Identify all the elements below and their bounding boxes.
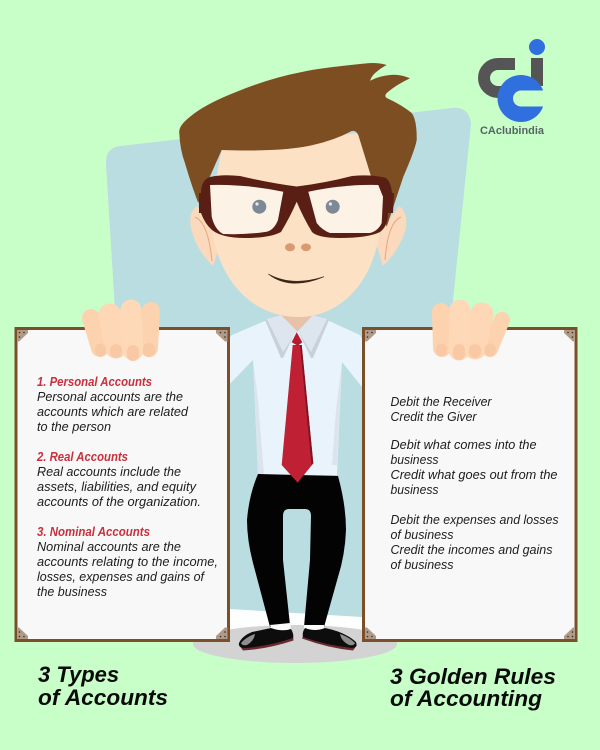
logo blue dot <box>529 39 545 55</box>
face <box>211 133 381 317</box>
character <box>179 63 417 650</box>
text: types of accounts: assets, liabilities, and equity <box>37 479 197 494</box>
text: golden rules: Debit the Receiver <box>390 394 492 409</box>
text: types of accounts: losses, expenses and gains of <box>37 569 205 584</box>
background panel <box>106 108 471 640</box>
text: types of accounts: to the person <box>37 419 111 434</box>
collar <box>265 314 329 358</box>
text: golden rules: Credit the Giver <box>390 409 477 424</box>
heading: 3 Golden Rules of Accounting: 3 Golden Rules <box>390 664 556 689</box>
board corners <box>365 330 575 639</box>
logo: CAclubindia <box>480 39 546 137</box>
text: types of accounts: the business <box>37 584 107 599</box>
text: golden rules: business <box>390 482 439 497</box>
board corners <box>17 330 228 639</box>
shirt <box>222 320 366 475</box>
hair <box>179 63 417 227</box>
text: types of accounts: 2. Real Accounts <box>36 449 128 464</box>
tie <box>282 332 313 483</box>
neck <box>280 315 312 332</box>
corner rivets <box>19 332 226 637</box>
right shoe <box>302 628 357 650</box>
text: types of accounts: Personal accounts are the <box>37 389 183 404</box>
socks <box>270 623 324 631</box>
floor shadow <box>193 625 397 663</box>
corner rivets <box>367 332 573 637</box>
text: types of accounts: accounts which are related <box>37 404 189 419</box>
heading: 3 Golden Rules of Accounting: of Accounting <box>390 686 543 711</box>
text: types of accounts: Nominal accounts are the <box>37 539 181 554</box>
logo blue C <box>498 75 546 122</box>
text: types of accounts: accounts relating to the income, <box>37 554 218 569</box>
logo dark i <box>531 58 543 86</box>
text: types of accounts: 3. Nominal Accounts <box>37 524 150 539</box>
logo dark C <box>484 64 515 92</box>
text: golden rules: Debit what comes into the <box>390 437 536 452</box>
text: golden rules: Credit what goes out from the <box>390 467 558 482</box>
panel: golden rules board <box>364 328 576 640</box>
text: types of accounts <box>36 374 218 599</box>
heading: 3 Types of Accounts: 3 Types <box>38 662 119 687</box>
eyes <box>252 200 340 214</box>
heading: 3 Golden Rules of Accounting <box>390 664 556 711</box>
mouth <box>268 274 324 283</box>
panel: types of accounts board <box>16 328 228 640</box>
text: golden rules: Debit the expenses and losses <box>390 512 559 527</box>
logo text: CAclubindia <box>480 125 545 137</box>
right hand <box>441 310 502 354</box>
pants <box>247 474 346 627</box>
heading: 3 Types of Accounts <box>38 662 168 710</box>
text: types of accounts: Real accounts include the <box>37 464 181 479</box>
text: golden rules <box>390 394 559 572</box>
text: types of accounts: accounts of the organization. <box>37 494 201 509</box>
text: golden rules: of business <box>390 527 454 542</box>
left shoe <box>239 628 294 650</box>
nose <box>285 243 311 251</box>
text: golden rules: business <box>390 452 439 467</box>
ears <box>190 206 406 266</box>
text: golden rules: of business <box>390 557 454 572</box>
text: types of accounts: 1. Personal Accounts <box>37 374 152 389</box>
text: golden rules: Credit the incomes and gains <box>390 542 553 557</box>
heading: 3 Types of Accounts: of Accounts <box>38 685 168 710</box>
left hand <box>91 310 151 355</box>
glasses <box>199 175 394 238</box>
